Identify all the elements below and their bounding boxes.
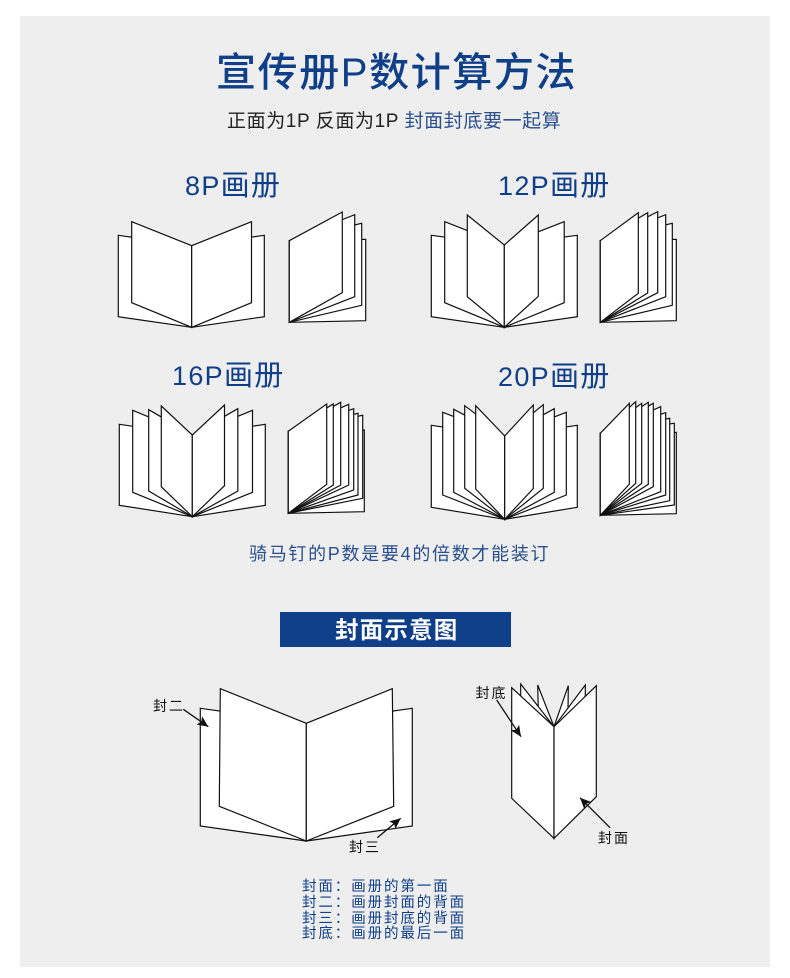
book: 20P open <box>431 405 577 519</box>
legend: 封三：画册封底的背面 <box>302 910 466 927</box>
banner: cover diagram <box>280 612 511 647</box>
label: back cover: 封底 <box>476 685 508 701</box>
label: inside front cover <box>153 698 208 727</box>
label: front cover: 封面 <box>598 830 630 846</box>
book: 12P open <box>431 215 577 327</box>
label: front cover <box>580 798 630 846</box>
legend: 封底：画册的最后一面 <box>302 925 466 942</box>
label: inside back cover: 封三 <box>349 839 381 855</box>
heading: 12P: 12P画册 <box>498 170 611 202</box>
heading: 8P: 8P画册 <box>185 170 281 202</box>
diagram: closed book covers <box>512 684 596 838</box>
book: 20P side <box>600 402 676 515</box>
legend: 封面：画册的第一面 <box>302 877 450 895</box>
legend: 封二：画册封面的背面 <box>302 894 466 911</box>
subtitle: 正面为1P 反面为1P 封面封底要一起算 <box>227 110 561 132</box>
label: inside front cover: 封二 <box>153 698 185 714</box>
legend <box>302 877 466 942</box>
heading: 16P: 16P画册 <box>172 360 285 392</box>
book: 16P open <box>119 405 265 517</box>
label: inside back cover <box>349 818 401 855</box>
banner: cover diagram: 封面示意图 <box>335 616 458 643</box>
book: 12P side <box>600 212 676 322</box>
label: back cover <box>476 685 521 737</box>
book: 8P open <box>118 222 264 327</box>
book: 16P side <box>288 402 364 513</box>
title: 宣传册P数计算方法 <box>216 51 577 95</box>
note: saddle stitch: 骑马钉的P数是要4的倍数才能装订 <box>249 544 550 564</box>
diagram: open book covers <box>200 689 412 841</box>
heading: 20P: 20P画册 <box>498 361 611 393</box>
book: 8P side <box>289 212 366 322</box>
